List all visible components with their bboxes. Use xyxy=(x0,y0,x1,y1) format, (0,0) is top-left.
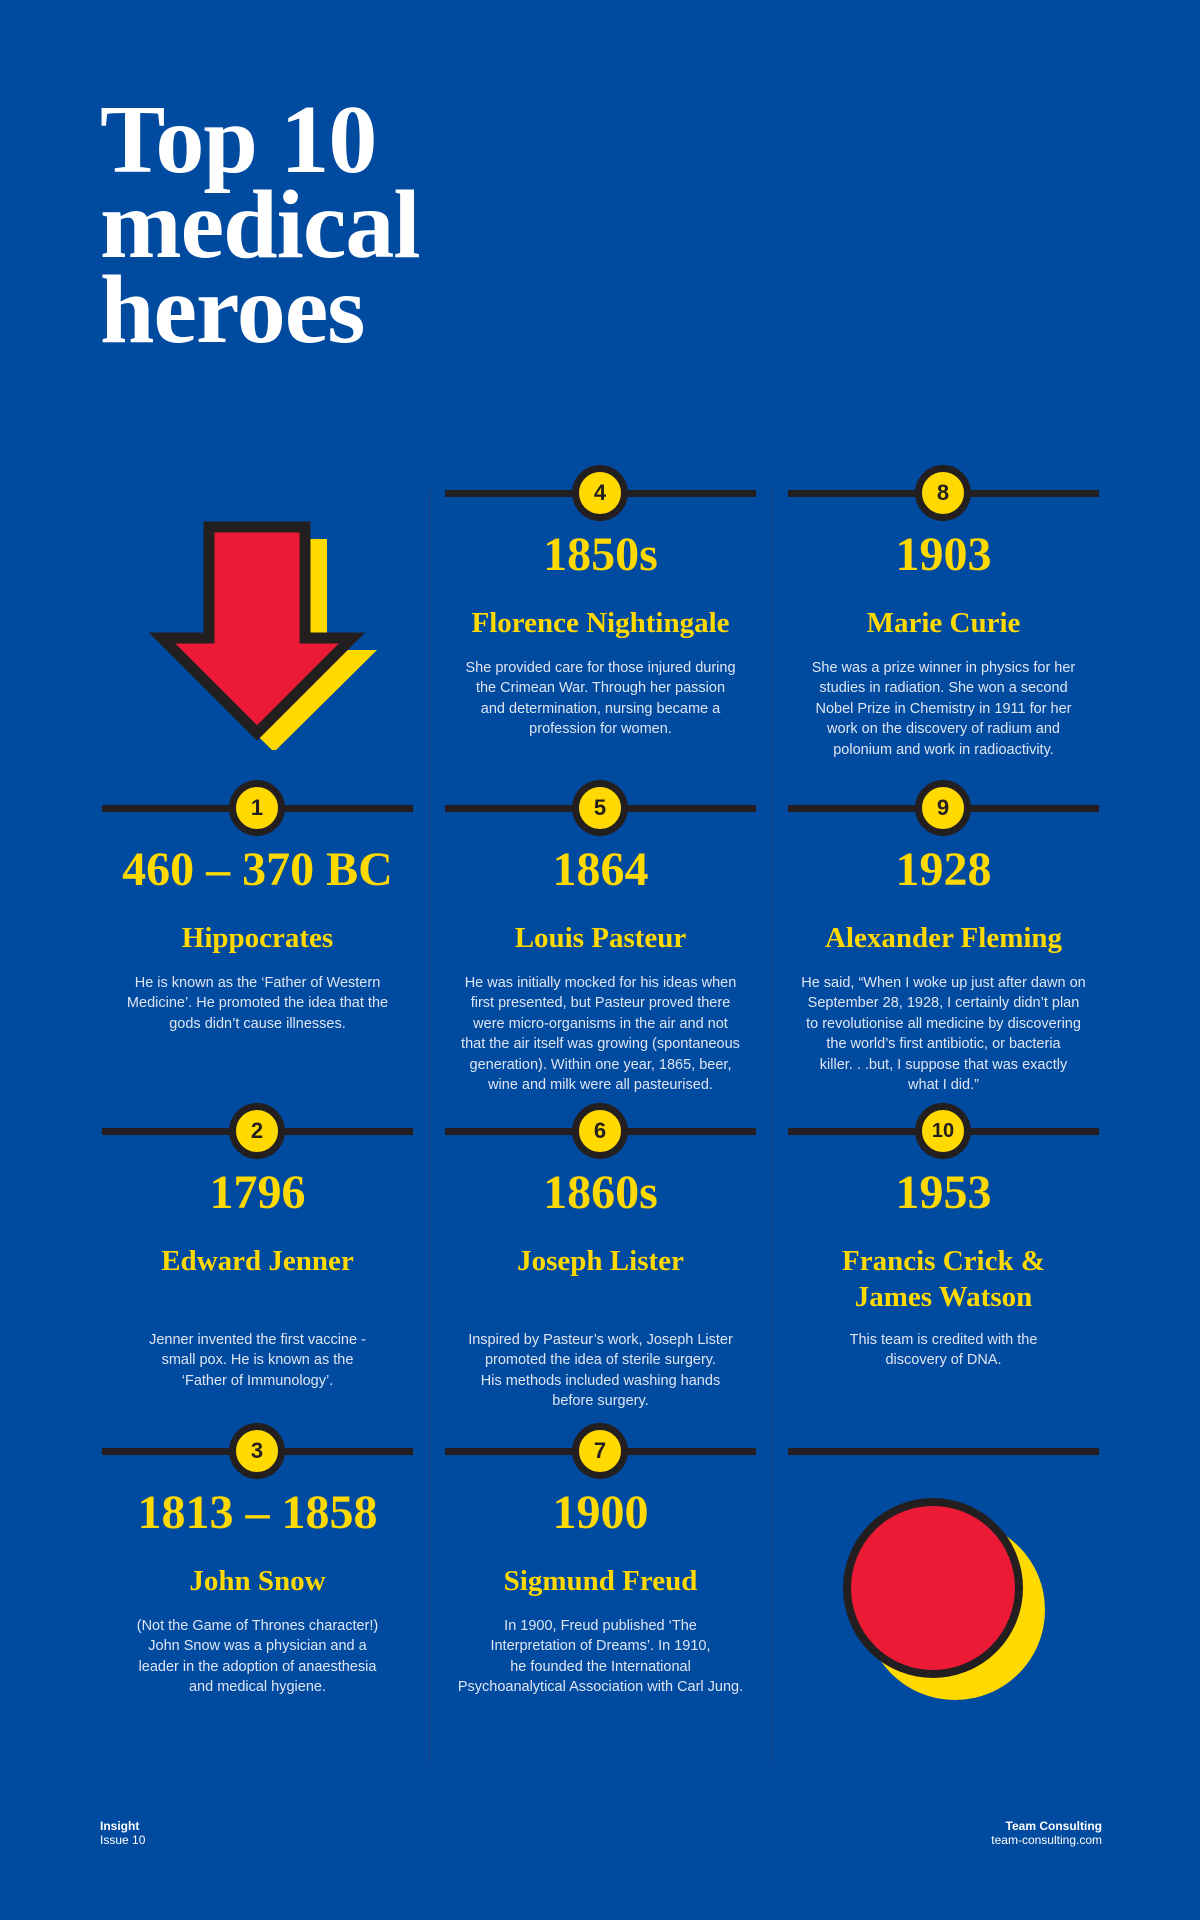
item 10: Crick & Watson: James Watson xyxy=(855,1281,1032,1313)
item 10: Crick & Watson: 1953 xyxy=(896,1166,992,1219)
item 1: Hippocrates xyxy=(102,780,413,1032)
item 5: Louis Pasteur: generation). Within one year, 1865, beer, xyxy=(470,1057,731,1073)
item 9: Alexander Fleming: killer. . .but, I suppose that was exactly xyxy=(820,1057,1067,1073)
item 10: Crick & Watson: This team is credited with the xyxy=(850,1332,1037,1348)
item 8: Marie Curie: studies in radiation. She won a second xyxy=(819,680,1068,696)
item 6: Joseph Lister: His methods included washing hands xyxy=(481,1373,720,1389)
icon: down arrow xyxy=(148,522,377,750)
item 4: Florence Nightingale: and determination, nursing became a xyxy=(481,701,720,717)
footer right: Team Consulting xyxy=(1006,1819,1102,1833)
item 9: Alexander Fleming: He said, “When I woke up just after dawn on xyxy=(801,975,1086,991)
item 2: Edward Jenner xyxy=(102,1103,413,1389)
item 8: Marie Curie: polonium and work in radioactivity. xyxy=(833,742,1054,758)
item 8: Marie Curie: work on the discovery of radium and xyxy=(827,721,1060,737)
item 8: Marie Curie: She was a prize winner in physics for her xyxy=(812,660,1075,676)
item 4: Florence Nightingale: 1850s xyxy=(543,528,658,581)
item 2: Edward Jenner: Edward Jenner xyxy=(161,1245,354,1277)
item 7: Sigmund Freud: 1900 xyxy=(552,1486,648,1539)
item 7: Sigmund Freud: Psychoanalytical Association with Carl Jung. xyxy=(458,1679,743,1695)
item 5: Louis Pasteur: 1864 xyxy=(552,843,648,896)
item 3: John Snow: 1813 – 1858 xyxy=(138,1486,378,1539)
item 10: Crick & Watson: discovery of DNA. xyxy=(885,1352,1002,1368)
final bar xyxy=(788,1448,1099,1455)
item 7: Sigmund Freud: he founded the International xyxy=(510,1659,691,1675)
item 6: Joseph Lister xyxy=(445,1103,756,1409)
footer right: team-consulting.com xyxy=(991,1833,1102,1847)
item 7: Sigmund Freud xyxy=(445,1423,756,1695)
item 2: Edward Jenner: small pox. He is known as the xyxy=(162,1352,353,1368)
item 5: Louis Pasteur: wine and milk were all pasteurised. xyxy=(488,1077,713,1093)
item 1: Hippocrates: Hippocrates xyxy=(182,922,333,954)
item 5: Louis Pasteur: Louis Pasteur xyxy=(515,922,686,954)
title xyxy=(100,86,420,364)
text: 1 xyxy=(251,795,263,820)
item 3: John Snow xyxy=(102,1423,413,1695)
title: medical xyxy=(100,171,420,279)
item 2: Edward Jenner: Jenner invented the first vaccine - xyxy=(149,1332,366,1348)
item 1: Hippocrates: 460 – 370 BC xyxy=(122,843,393,896)
title: heroes xyxy=(100,256,364,364)
item 8: Marie Curie: 1903 xyxy=(896,528,992,581)
item 5: Louis Pasteur: that the air itself was growing (spontaneous xyxy=(461,1036,740,1052)
item 4: Florence Nightingale: She provided care for those injured during xyxy=(465,660,736,676)
text: 2 xyxy=(251,1118,263,1143)
item 4: Florence Nightingale: profession for women. xyxy=(529,721,672,737)
item 6: Joseph Lister: Joseph Lister xyxy=(517,1245,684,1277)
item 10: Crick & Watson: Francis Crick & xyxy=(842,1245,1045,1277)
item 6: Joseph Lister: 1860s xyxy=(543,1166,658,1219)
text: 5 xyxy=(594,795,606,820)
title: Top 10 xyxy=(100,86,376,194)
footer left: Issue 10 xyxy=(100,1833,145,1847)
item 9: Alexander Fleming: Alexander Fleming xyxy=(825,922,1062,954)
footer left xyxy=(100,1819,145,1847)
item 9: Alexander Fleming: 1928 xyxy=(896,843,992,896)
item 3: John Snow: John Snow was a physician and a xyxy=(148,1638,367,1654)
item 5: Louis Pasteur: first presented, but Pasteur proved there xyxy=(471,995,730,1011)
item 3: John Snow: leader in the adoption of anaesthesia xyxy=(139,1659,376,1675)
item 6: Joseph Lister: Inspired by Pasteur’s work, Joseph Lister xyxy=(468,1332,733,1348)
item 8: Marie Curie: Marie Curie xyxy=(867,607,1020,639)
text: 9 xyxy=(937,795,949,820)
item 9: Alexander Fleming: what I did.” xyxy=(908,1077,979,1093)
item 5: Louis Pasteur: He was initially mocked for his ideas when xyxy=(465,975,736,991)
item 5: Louis Pasteur: were micro-organisms in the air and not xyxy=(473,1016,728,1032)
footer left: Insight xyxy=(100,1819,139,1833)
item 6: Joseph Lister: promoted the idea of sterile surgery. xyxy=(485,1352,716,1368)
item 4: Florence Nightingale: the Crimean War. Through her passion xyxy=(476,680,725,696)
item 4: Florence Nightingale: Florence Nightingale xyxy=(471,607,730,639)
text: 4 xyxy=(594,480,606,505)
item 9: Alexander Fleming xyxy=(788,780,1099,1093)
item 3: John Snow: and medical hygiene. xyxy=(189,1679,326,1695)
text: 7 xyxy=(594,1438,606,1463)
item 9: Alexander Fleming: to revolutionise all medicine by discovering xyxy=(806,1016,1081,1032)
item 9: Alexander Fleming: the world’s first antibiotic, or bacteria xyxy=(826,1036,1061,1052)
item 8: Marie Curie: Nobel Prize in Chemistry in 1911 for her xyxy=(815,701,1072,717)
item 10: Crick & Watson: 10 xyxy=(932,1120,954,1142)
item 9: Alexander Fleming: September 28, 1928, I certainly didn’t plan xyxy=(808,995,1079,1011)
item 7: Sigmund Freud: Sigmund Freud xyxy=(504,1565,697,1597)
item 3: John Snow: (Not the Game of Thrones character!) xyxy=(137,1618,378,1634)
item 1: Hippocrates: Medicine’. He promoted the idea that the xyxy=(127,995,388,1011)
item 3: John Snow: John Snow xyxy=(189,1565,326,1597)
text: 8 xyxy=(937,480,949,505)
item 5: Louis Pasteur xyxy=(445,780,756,1093)
icon: red circle xyxy=(843,1498,1045,1700)
footer right xyxy=(991,1819,1102,1847)
item 1: Hippocrates: gods didn’t cause illnesses. xyxy=(169,1016,346,1032)
text: 3 xyxy=(251,1438,263,1463)
text: 6 xyxy=(594,1118,606,1143)
item 2: Edward Jenner: ‘Father of Immunology’. xyxy=(182,1373,333,1389)
item 6: Joseph Lister: before surgery. xyxy=(552,1393,649,1409)
item 7: Sigmund Freud: Interpretation of Dreams’. In 1910, xyxy=(490,1638,711,1654)
item 4: Florence Nightingale xyxy=(445,465,756,737)
item 1: Hippocrates: He is known as the ‘Father of Western xyxy=(135,975,380,991)
item 10: Crick & Watson xyxy=(788,1103,1099,1368)
item 8: Marie Curie xyxy=(788,465,1099,758)
item 7: Sigmund Freud: In 1900, Freud published ‘The xyxy=(504,1618,697,1634)
item 2: Edward Jenner: 1796 xyxy=(210,1166,306,1219)
